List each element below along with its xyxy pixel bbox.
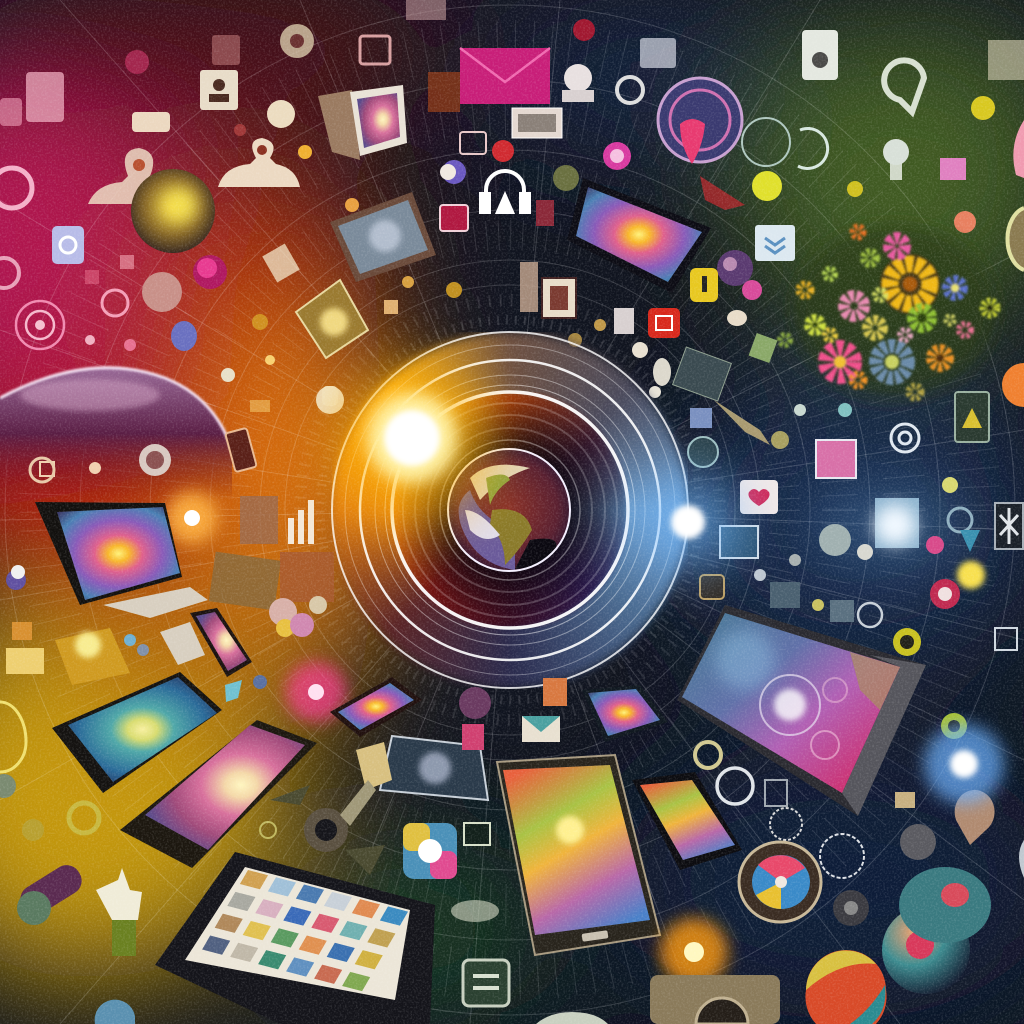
bottom left objects — [0, 774, 509, 1024]
picture frame — [318, 85, 407, 160]
globe — [448, 449, 570, 571]
photo stack and small icons — [356, 678, 995, 878]
large phone — [497, 755, 660, 955]
tablet with app grid — [155, 852, 435, 1024]
dark inner shade — [392, 392, 628, 628]
blue flare: right of centre — [638, 472, 738, 572]
flower cluster — [780, 225, 997, 398]
small tablet: centre right — [582, 685, 668, 742]
headphones icon — [481, 171, 529, 212]
right side icons and photos — [673, 333, 1023, 739]
lens: colour wheel — [739, 842, 821, 922]
left mid icons — [0, 428, 334, 772]
top centre icons — [384, 19, 680, 398]
blue-white glare: lower right — [924, 724, 1004, 804]
icon cluster: top left — [0, 0, 468, 414]
swirl target: top right — [658, 78, 828, 168]
concentric rings — [332, 332, 688, 688]
outer glowing annulus — [332, 332, 688, 688]
small tablet: centre left — [330, 677, 422, 737]
tablet: top right of centre — [567, 176, 745, 293]
planet: golden top left — [131, 169, 215, 253]
location pin clouds — [88, 138, 300, 204]
envelope — [460, 48, 550, 104]
small phone — [632, 772, 742, 870]
large planet: left — [0, 368, 232, 500]
tablet: tilted top centre-left — [330, 192, 436, 282]
central vortex — [332, 332, 688, 688]
yellow glare: bottom centre — [660, 918, 728, 986]
laptop — [35, 502, 208, 618]
tablet: lower left diagonal — [120, 720, 317, 868]
tablet: bottom left — [52, 672, 222, 793]
top right icons — [690, 30, 1024, 407]
inner swirling disc — [392, 392, 628, 628]
camera glass object — [296, 280, 368, 358]
phone: leaning left — [160, 598, 314, 677]
big tablet: right — [677, 605, 926, 816]
sun flare: left of centre — [332, 365, 492, 525]
magenta flare — [286, 662, 346, 722]
camera and balls: bottom right — [536, 840, 1024, 1024]
